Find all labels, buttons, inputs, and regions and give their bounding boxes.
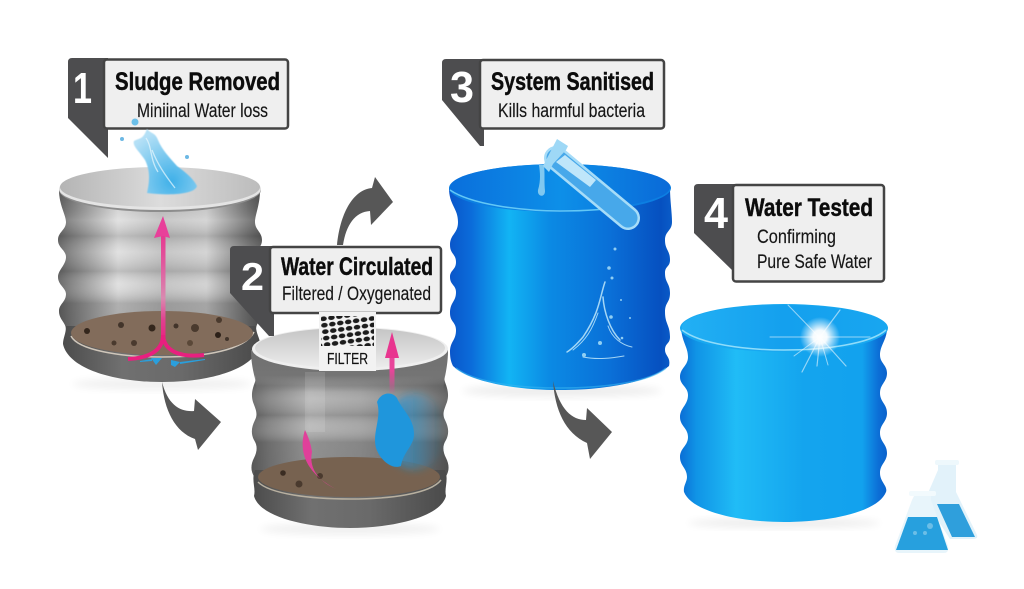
heading 2: Water Circulated <box>281 253 433 281</box>
tank 3 top surface <box>449 164 671 212</box>
number 4: 4 <box>704 189 729 238</box>
label 3 tab <box>442 59 484 146</box>
filter light beam <box>305 372 325 432</box>
arrow: step 2 to step 3 <box>337 177 393 245</box>
filter top over label edge <box>319 312 376 316</box>
tank 1 body <box>58 190 262 330</box>
label 4: water tested <box>694 184 884 282</box>
subtext 4: Confirming <box>757 227 836 248</box>
tank 1 lid <box>59 167 261 212</box>
label 2 box <box>270 247 441 313</box>
subtext 3: Kills harmful bacteria <box>498 101 645 122</box>
tank 2 base <box>253 470 447 528</box>
heading 4: Water Tested <box>745 194 873 222</box>
label 2: water circulated <box>230 246 441 336</box>
heading 3: System Sanitised <box>491 68 654 96</box>
tank 3 body <box>449 188 672 390</box>
label 4 tab <box>694 184 737 271</box>
pink upward arrow <box>385 332 399 393</box>
lab flasks <box>895 460 977 553</box>
tank 4 body <box>680 328 887 522</box>
tank 1: sludge removal <box>55 167 265 390</box>
number 1: 1 <box>73 64 92 113</box>
pink sludge flow <box>303 430 336 489</box>
back flask <box>925 460 977 539</box>
tank 4 top surface <box>680 304 888 352</box>
tank 1 shadow <box>72 378 252 390</box>
tank 3: system sanitised <box>449 139 672 397</box>
tank 4: water tested <box>680 304 888 528</box>
blue water haze <box>385 394 445 470</box>
blue water blob <box>375 393 414 467</box>
subtext 1: Miniinal Water loss <box>137 101 268 122</box>
label 1 box <box>104 60 288 128</box>
water splash <box>120 118 197 194</box>
tank 3 shadow <box>462 385 662 397</box>
tank 1 base ring <box>63 326 260 382</box>
number 2: 2 <box>241 256 264 299</box>
number 3: 3 <box>450 63 474 112</box>
subtext 4 line 2: Pure Safe Water <box>757 252 873 273</box>
front flask <box>895 491 948 553</box>
tank 2: water circulated <box>248 311 452 535</box>
label 1: sludge removed <box>68 58 288 158</box>
test tube pouring <box>538 139 628 218</box>
label 3 box <box>480 60 664 128</box>
tank 1 sludge layer <box>71 311 254 357</box>
tank 2 shadow <box>260 523 440 535</box>
tank 2 rim <box>251 327 448 392</box>
tank 2 body <box>251 352 449 476</box>
sparkle <box>770 305 870 372</box>
filter panel: FILTER <box>327 351 368 368</box>
label 1 tab <box>68 58 108 158</box>
label 4 box <box>733 185 884 282</box>
filter panel <box>319 311 376 371</box>
tank 3 bottom highlight <box>456 368 666 388</box>
arrow: step 3 to step 4 <box>553 381 612 459</box>
subtext 2: Filtered / Oxygenated <box>282 284 431 305</box>
tank 4 shadow <box>688 518 880 528</box>
tank 2 sludge layer <box>258 457 441 499</box>
arrow: step 1 to step 2 <box>162 382 221 450</box>
blue drips under sludge <box>140 358 205 367</box>
pink circulation arrow <box>128 216 204 359</box>
heading 1: Sludge Removed <box>115 68 280 96</box>
tank 3 splash <box>567 248 632 359</box>
label 2 tab <box>230 246 274 336</box>
label 3: system sanitised <box>442 59 664 146</box>
